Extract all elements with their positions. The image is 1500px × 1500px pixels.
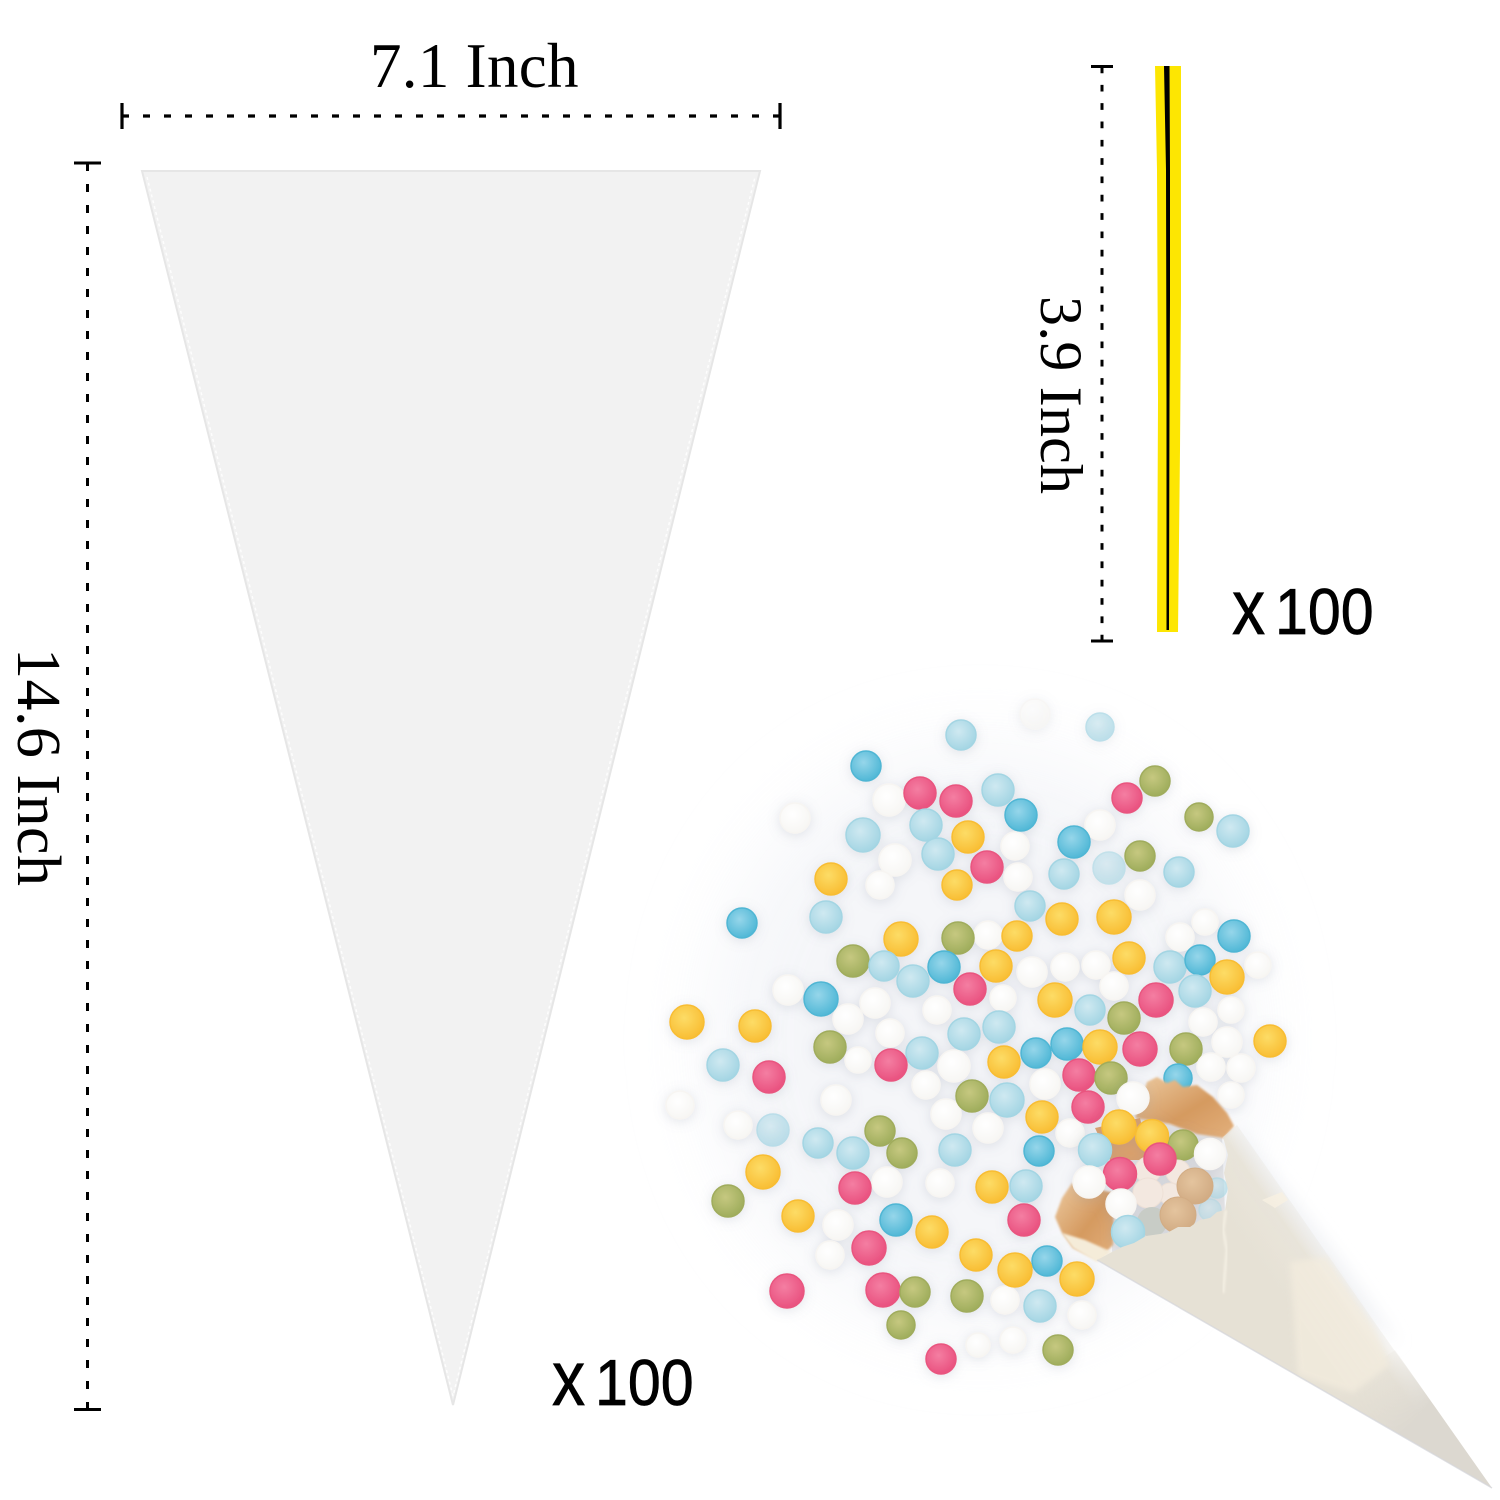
dimension line: bag width [122,103,780,129]
quantity label: bags [552,1335,694,1422]
cellophane cone bag shape [142,171,760,1405]
quantity label: bags: 100 [595,1347,694,1420]
scattered candy balls [666,699,1286,1374]
dimension line: bag height [74,163,101,1410]
quantity label: twist ties [1232,564,1374,651]
heading: bag width label: 7.1 Inch [370,31,578,101]
heading: bag height label: 14.6 Inch [4,648,72,886]
twist tie [1155,66,1181,632]
quantity label: bags: x [552,1335,585,1422]
cone rear shadow haze [1220,1125,1400,1345]
candy balls inside cone [1073,1082,1227,1248]
heading: twist tie length label: 3.9 Inch [1028,296,1094,494]
quantity label: twist ties: x [1232,564,1265,651]
photo: sprinkles spilling from cone [666,699,1492,1488]
dimension line: twist tie length [1091,66,1113,641]
background haze under sprinkles [710,750,1250,1330]
wafer cone inner lining [1055,1077,1234,1262]
translucent cone body [1097,1125,1492,1488]
quantity label: twist ties: 100 [1275,576,1374,649]
